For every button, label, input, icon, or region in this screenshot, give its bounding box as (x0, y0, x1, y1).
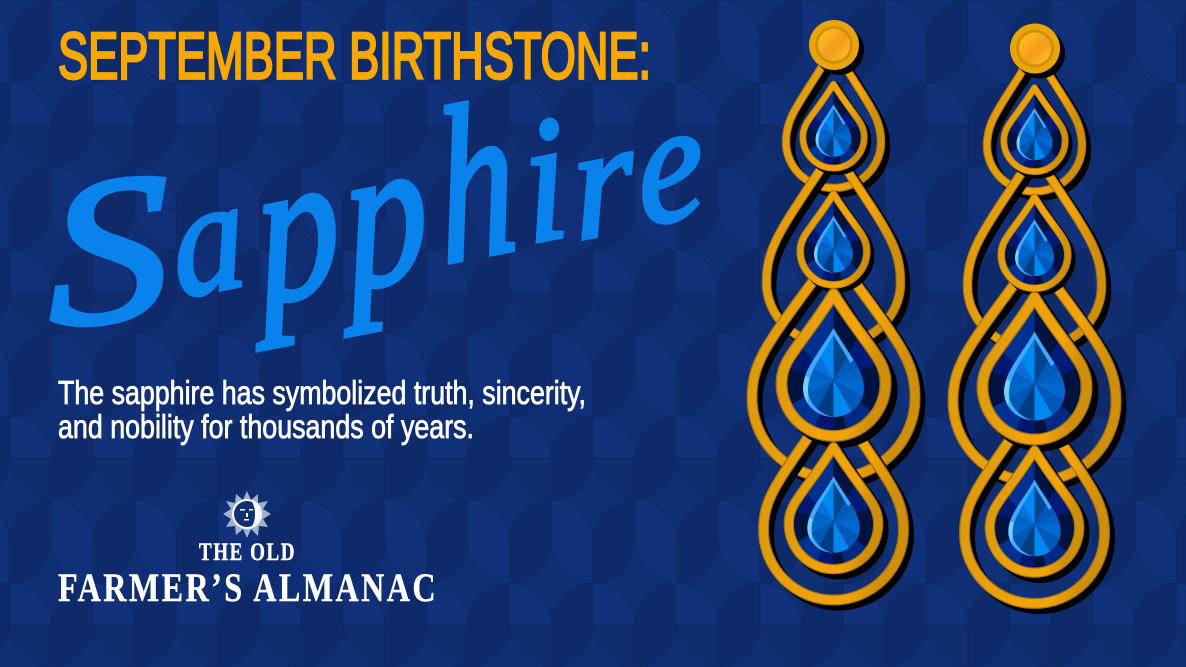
logo: The Old Farmer's Almanac (58, 491, 438, 610)
title: Sapphire: p (325, 90, 436, 337)
earring: right (934, 24, 1134, 610)
body text (58, 374, 586, 445)
title: Sapphire: a (163, 143, 253, 333)
body text: and nobility for thousands of years. (58, 408, 474, 445)
title: Sapphire: i (515, 78, 575, 282)
logo wordmark: THE OLD (199, 539, 296, 566)
heading: September Birthstone: SEPTEMBER BIRTHSTONE: (58, 20, 651, 92)
body text: The sapphire has symbolized truth, sincerity, (58, 374, 586, 411)
title: Sapphire: r (565, 85, 642, 275)
title: Sapphire: h (427, 53, 524, 311)
earring: left (734, 20, 934, 607)
title: Sapphire: S (43, 127, 173, 373)
title: Sapphire (43, 53, 711, 373)
logo wordmark: FARMER’S ALMANAC (58, 565, 438, 610)
logo wordmark (58, 539, 438, 610)
icon: sun and moon face (223, 491, 271, 538)
title: Sapphire: p (237, 104, 348, 351)
title: Sapphire: e (629, 64, 711, 263)
